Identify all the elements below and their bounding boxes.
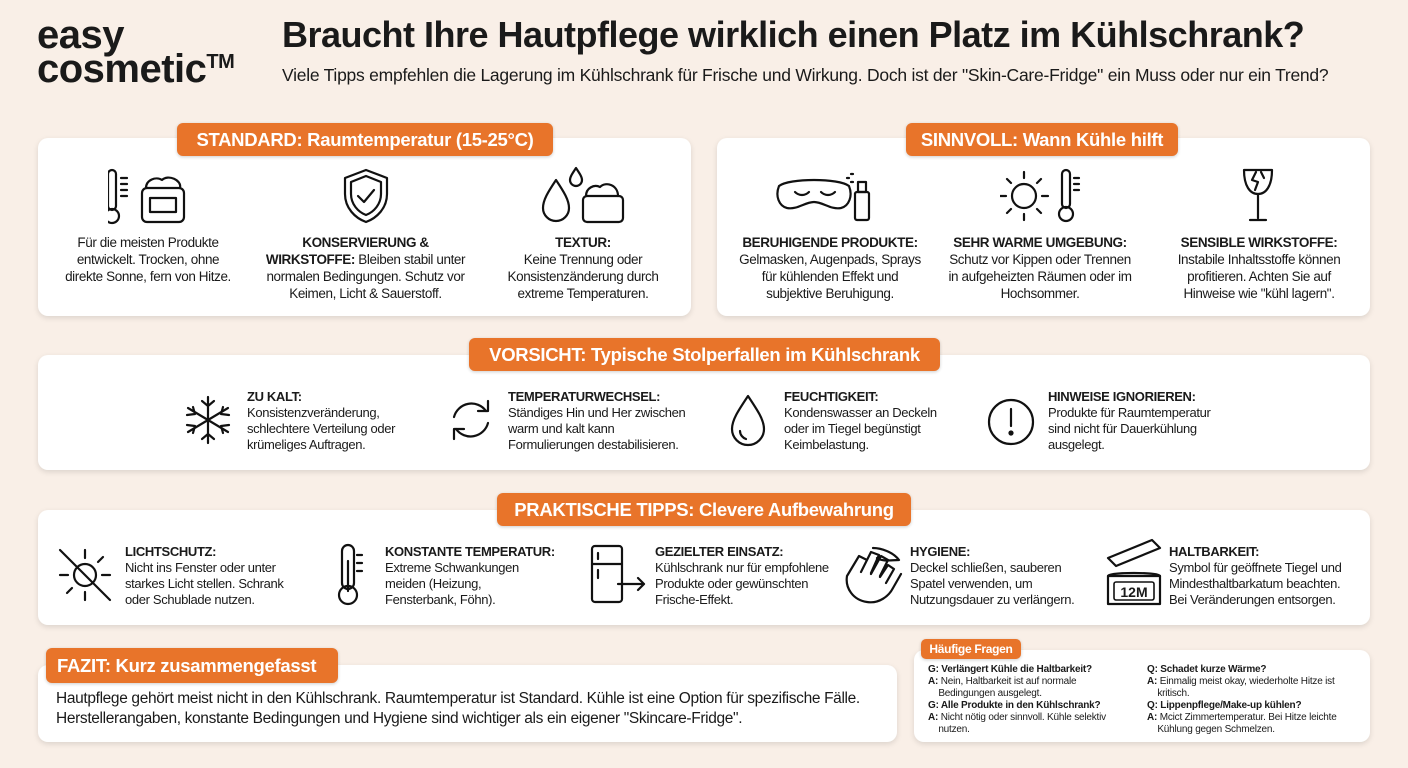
text: faq right: Kühlung gegen Schmelzen. [1157,724,1275,735]
pill: praktische tipps [497,493,911,526]
panel: standard [38,138,691,316]
pill: faq: Häufige Fragen [929,642,1013,656]
text: konservierung: KONSERVIERUNG & [302,235,429,250]
text: haltbarkeit: HALTBARKEIT: [1169,544,1259,559]
text: konstante temperatur [385,544,555,607]
icon: shield [344,168,388,224]
text: konstante temperatur: KONSTANTE TEMPERATUR: [385,544,555,559]
text: faq right: A: Einmalig meist okay, wiederholte Hitze ist [1147,676,1335,687]
text: konstante temperatur: Extreme Schwankungen meiden (Heizung, Fensterbank, Föhn). [385,560,519,607]
panel: fazit [38,665,897,742]
icon: jar 12M: 12M [1120,584,1148,600]
icon: snowflake [186,396,230,444]
text: zu kalt: ZU KALT: [247,389,302,404]
text: konservierung: WIRKSTOFFE: Bleiben stabil unter normalen Bedingungen. Schutz vor Keimen, Licht & Sauerstoff. [266,252,465,301]
pill: vorsicht [469,338,940,371]
icon: no sun [58,548,112,602]
text: fazit: Hautpflege gehört meist nicht in den Kühlschrank. Raumtemperatur ist Standard. Kühle ist eine Option für spezifische Fälle. [56,690,860,707]
text: beruhigende: BERUHIGENDE PRODUKTE: Gelmasken, Augenpads, Sprays für kühlenden Effekt und subjektive Beruhigung. [739,235,921,301]
text: lichtschutz: Nicht ins Fenster oder unter starkes Licht stellen. Schrank oder Schublade nutzen. [125,560,284,607]
icon: cycle arrows [452,400,490,440]
icon: broken glass [1242,168,1274,222]
icon: drop [730,394,766,446]
icon: drops and jar [542,166,624,224]
pill: sinnvoll: SINNVOLL: Wann Kühle hilft [921,129,1163,150]
logo [37,13,234,91]
text: fazit: Herstellerangaben, konstante Bedingungen und Hygiene sind wichtiger als ein eigener "Skincare-Fridge". [56,710,742,727]
pill: standard: STANDARD: Raumtemperatur (15-25°C) [196,129,534,150]
text: warme umgebung: SEHR WARME UMGEBUNG: Schutz vor Kippen oder Trennen in aufgeheizten Räumen oder im Hochsommer. [948,235,1132,301]
text: hinweise: HINWEISE IGNORIEREN: [1048,389,1196,404]
text: textur: Keine Trennung oder Konsistenzänderung durch extreme Temperaturen. [507,252,658,301]
text: temperaturwechsel: Ständiges Hin und Her zwischen warm und kalt kann Formulierungen destabilisieren. [508,405,685,452]
text: fazit [56,690,860,727]
text: faq right: Q: Schadet kurze Wärme? [1147,664,1266,675]
logo: cosmeticTM [37,47,234,91]
text: faq left: A: Nicht nötig oder sinnvoll. Kühle selektiv [928,712,1106,723]
title: Braucht Ihre Hautpflege wirklich einen Platz im Kühlschrank? [282,14,1304,55]
text: hygiene: HYGIENE: [910,544,970,559]
icon: exclamation [988,398,1034,446]
text: faq left: G: Verlängert Kühle die Haltbarkeit? [928,664,1092,675]
text: feuchtigkeit: FEUCHTIGKEIT: [784,389,878,404]
panel: sinnvoll [717,138,1370,316]
pill: praktische tipps: PRAKTISCHE TIPPS: Clevere Aufbewahrung [514,499,894,520]
pill: fazit [46,648,338,683]
text: feuchtigkeit: Kondenswasser an Deckeln oder im Tiegel begünstigt Keimbelastung. [784,405,937,452]
text: faq left: Bedingungen ausgelegt. [938,688,1042,699]
subtitle: Viele Tipps empfehlen die Lagerung im Kühlschrank für Frische und Wirkung. Doch ist der "Skin-Care-Fridge" ein Muss oder nur ein Trend? [282,65,1328,85]
text: lichtschutz: LICHTSCHUTZ: [125,544,216,559]
icon: eye mask and spray [776,172,870,222]
text: faq right: A: Mcict Zimmertemperatur. Bei Hitze leichte [1147,712,1337,723]
text: faq left: nutzen. [938,724,970,735]
pill: standard [177,123,553,156]
text: haltbarkeit: Symbol für geöffnete Tiegel und Mindesthaltbarkatum beachten. Bei Veränderungen entsorgen. [1169,560,1341,607]
text: faq right: kritisch. [1157,688,1189,699]
text: gezielter einsatz: GEZIELTER EINSATZ: [655,544,783,559]
text: zu kalt: Konsistenzveränderung, schlechtere Verteilung oder krümeliges Auftragen. [247,405,395,452]
icon: jar 12M [1106,538,1162,606]
pill: vorsicht: VORSICHT: Typische Stolperfallen im Kühlschrank [489,344,920,365]
panel: praktische tipps [38,510,1370,625]
pill: sinnvoll [906,123,1178,156]
text: faq right: Q: Lippenpflege/Make-up kühlen? [1147,700,1301,711]
text: hinweise: Produkte für Raumtemperatur sind nicht für Dauerkühlung ausgelegt. [1048,405,1211,452]
panel: vorsicht [38,355,1370,470]
logo: easy [37,13,124,57]
panel: faq [914,650,1370,742]
pill: fazit: FAZIT: Kurz zusammengefasst [57,655,316,676]
text: hygiene: Deckel schließen, sauberen Spatel verwenden, um Nutzungsdauer zu verlängern. [910,560,1074,607]
icon: hand wiping [846,546,902,604]
text: sensible wirkstoffe: SENSIBLE WIRKSTOFFE: Instabile Inhaltsstoffe können profitieren. Achten Sie auf Hinweise wie "kühl lagern". [1178,235,1340,301]
icon: thermometer [338,544,364,606]
text: gezielter einsatz: Kühlschrank nur für empfohlene Produkte oder gewünschten Frische-Effekt. [655,560,829,607]
text: temperaturwechsel: TEMPERATURWECHSEL: [508,389,660,404]
pill: faq [921,639,1021,659]
text: textur: TEXTUR: [555,235,611,250]
icon: sun and thermometer [1000,168,1080,222]
text: faq left: A: Nein, Haltbarkeit ist auf normale [928,676,1076,687]
icon: thermometer and jar [108,168,186,224]
text: standard col 1: Für die meisten Produkte entwickelt. Trocken, ohne direkte Sonne, fern von Hitze. [65,235,231,284]
text: faq left: G: Alle Produkte in den Kühlschrank? [928,700,1100,711]
text: faq right [1147,664,1337,735]
text: faq left [928,664,1106,735]
icon: fridge with arrow [590,544,646,604]
